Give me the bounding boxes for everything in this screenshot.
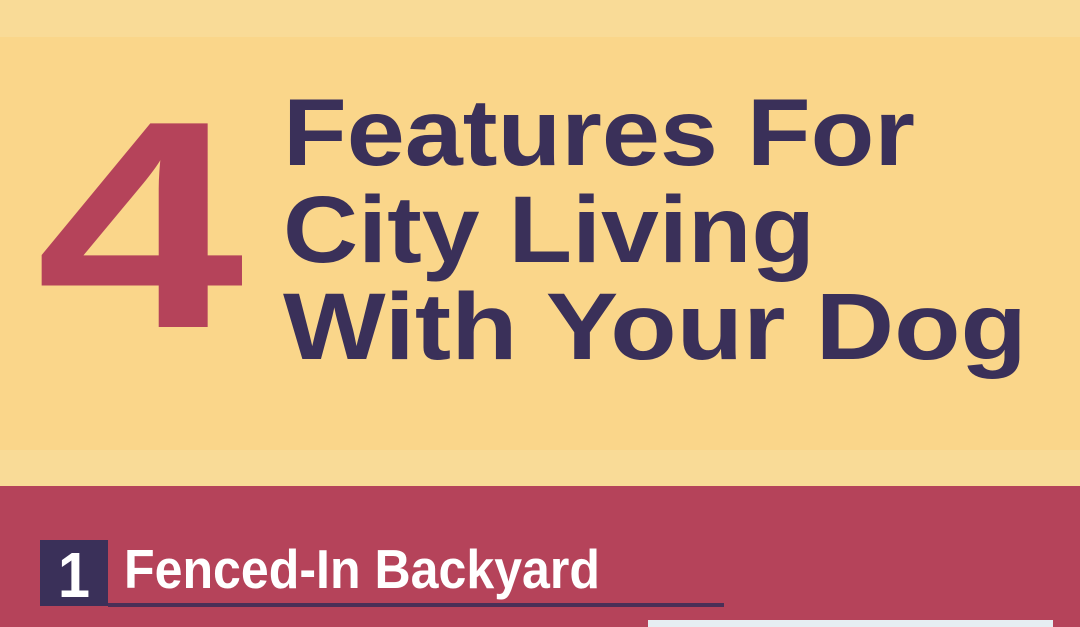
section 1 heading: Fenced-In Backyard (124, 538, 600, 600)
title text: City Living (283, 177, 815, 283)
bottom light band (0, 450, 1080, 486)
red section (0, 486, 1080, 627)
section 1 heading: 1 (58, 539, 90, 611)
section 1 heading (40, 538, 724, 611)
big number 4: 4 (36, 59, 246, 390)
image placeholder (648, 620, 1053, 627)
title text: With Your Dog (283, 274, 1027, 380)
title text: Features For (283, 80, 915, 186)
top band (0, 0, 1080, 37)
title text (283, 80, 1027, 380)
